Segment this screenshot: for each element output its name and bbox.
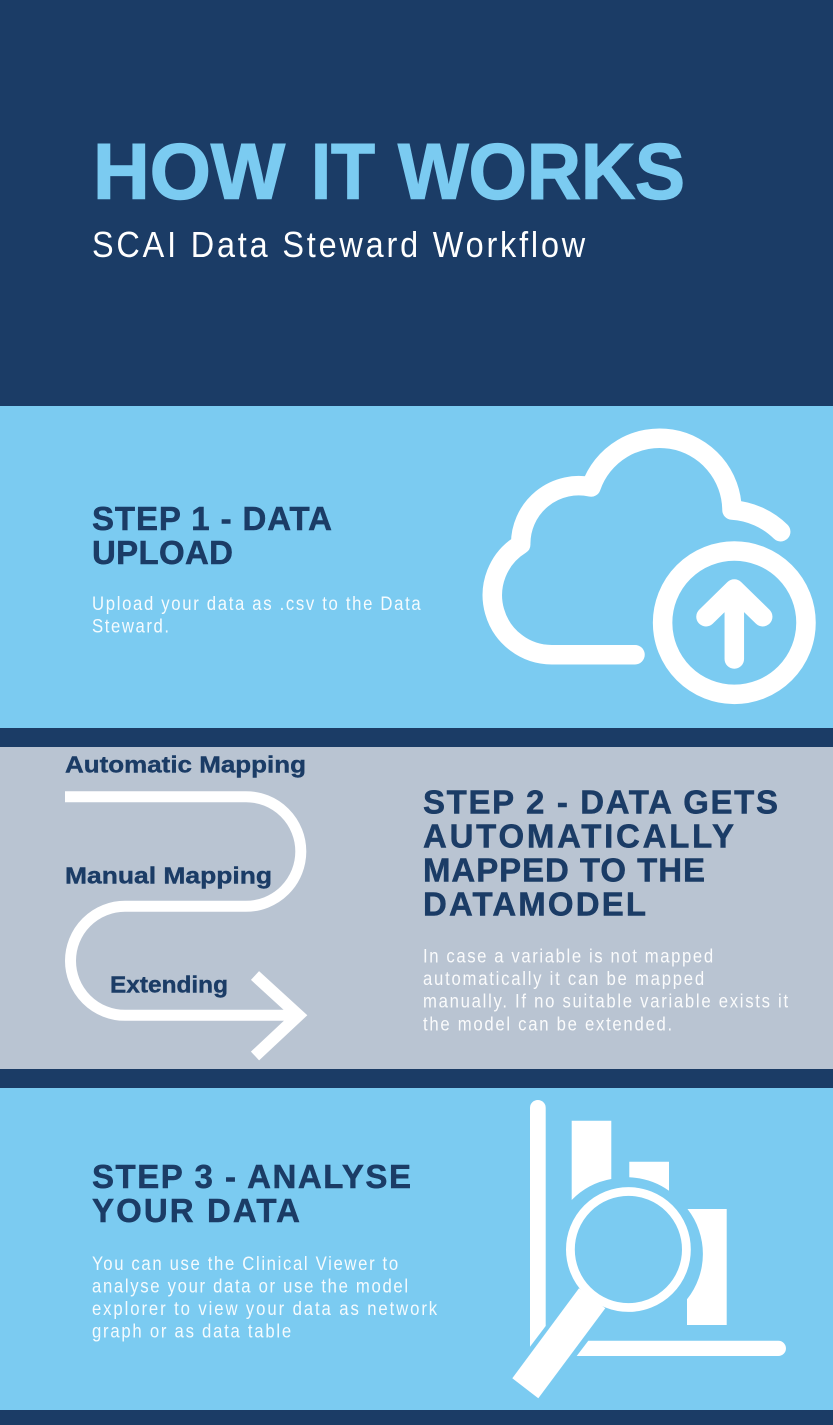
- step 2 heading: AUTOMATICALLY: [423, 818, 734, 854]
- step 2 body text: the model can be extended.: [423, 1014, 672, 1035]
- step 3 heading: STEP 3 - ANALYSE: [92, 1158, 411, 1195]
- title: WORKS: [398, 126, 685, 216]
- label: extending: Extending: [110, 971, 228, 997]
- title: [93, 126, 685, 216]
- step 1 heading: [92, 500, 332, 571]
- step 3 body text: graph or as data table: [92, 1321, 291, 1342]
- step 1 heading: STEP 1 - DATA: [92, 500, 332, 537]
- panel: header: [92, 126, 685, 265]
- step 3 body text: You can use the Clinical Viewer to: [92, 1253, 398, 1274]
- icon: winding arrow: [65, 797, 301, 1056]
- step 3 heading: YOUR DATA: [92, 1192, 300, 1229]
- panel: step 2: [0, 747, 833, 1069]
- label: automatic mapping: Automatic Mapping: [65, 752, 306, 778]
- step 2 background: [0, 747, 833, 1069]
- panel: step 1: [0, 406, 833, 728]
- step 2 body text: manually. If no suitable variable exists it: [423, 991, 788, 1012]
- panel: step 3: [0, 1088, 833, 1410]
- subtitle: SCAI Data Steward Workflow: [92, 225, 585, 265]
- step 2 heading: DATAMODEL: [423, 886, 646, 922]
- step 1 heading: UPLOAD: [92, 534, 233, 571]
- step 3 background: [0, 1088, 833, 1410]
- step 3 body text: explorer to view your data as network: [92, 1298, 437, 1319]
- title: IT: [311, 126, 375, 216]
- label: manual mapping: Manual Mapping: [65, 862, 272, 888]
- step 2 body text: In case a variable is not mapped: [423, 946, 713, 967]
- step 3 body text: analyse your data or use the model: [92, 1275, 408, 1297]
- step 1 body text: [92, 593, 421, 637]
- step 3 body text: [92, 1253, 437, 1342]
- step 2 heading: STEP 2 - DATA GETS: [423, 784, 778, 820]
- step 3 heading: [92, 1158, 411, 1229]
- step 2 heading: MAPPED TO THE: [423, 852, 705, 888]
- icon: cloud upload: [492, 438, 806, 694]
- step 2 body text: automatically it can be mapped: [423, 968, 704, 989]
- step 2 body text: [423, 946, 788, 1035]
- step 1 body text: Upload your data as .csv to the Data: [92, 593, 421, 614]
- step 2 heading: [423, 784, 778, 922]
- step 1 background: [0, 406, 833, 728]
- step 1 body text: Steward.: [92, 616, 169, 637]
- title: HOW: [93, 126, 285, 216]
- icon: chart with magnifier: [512, 1100, 786, 1398]
